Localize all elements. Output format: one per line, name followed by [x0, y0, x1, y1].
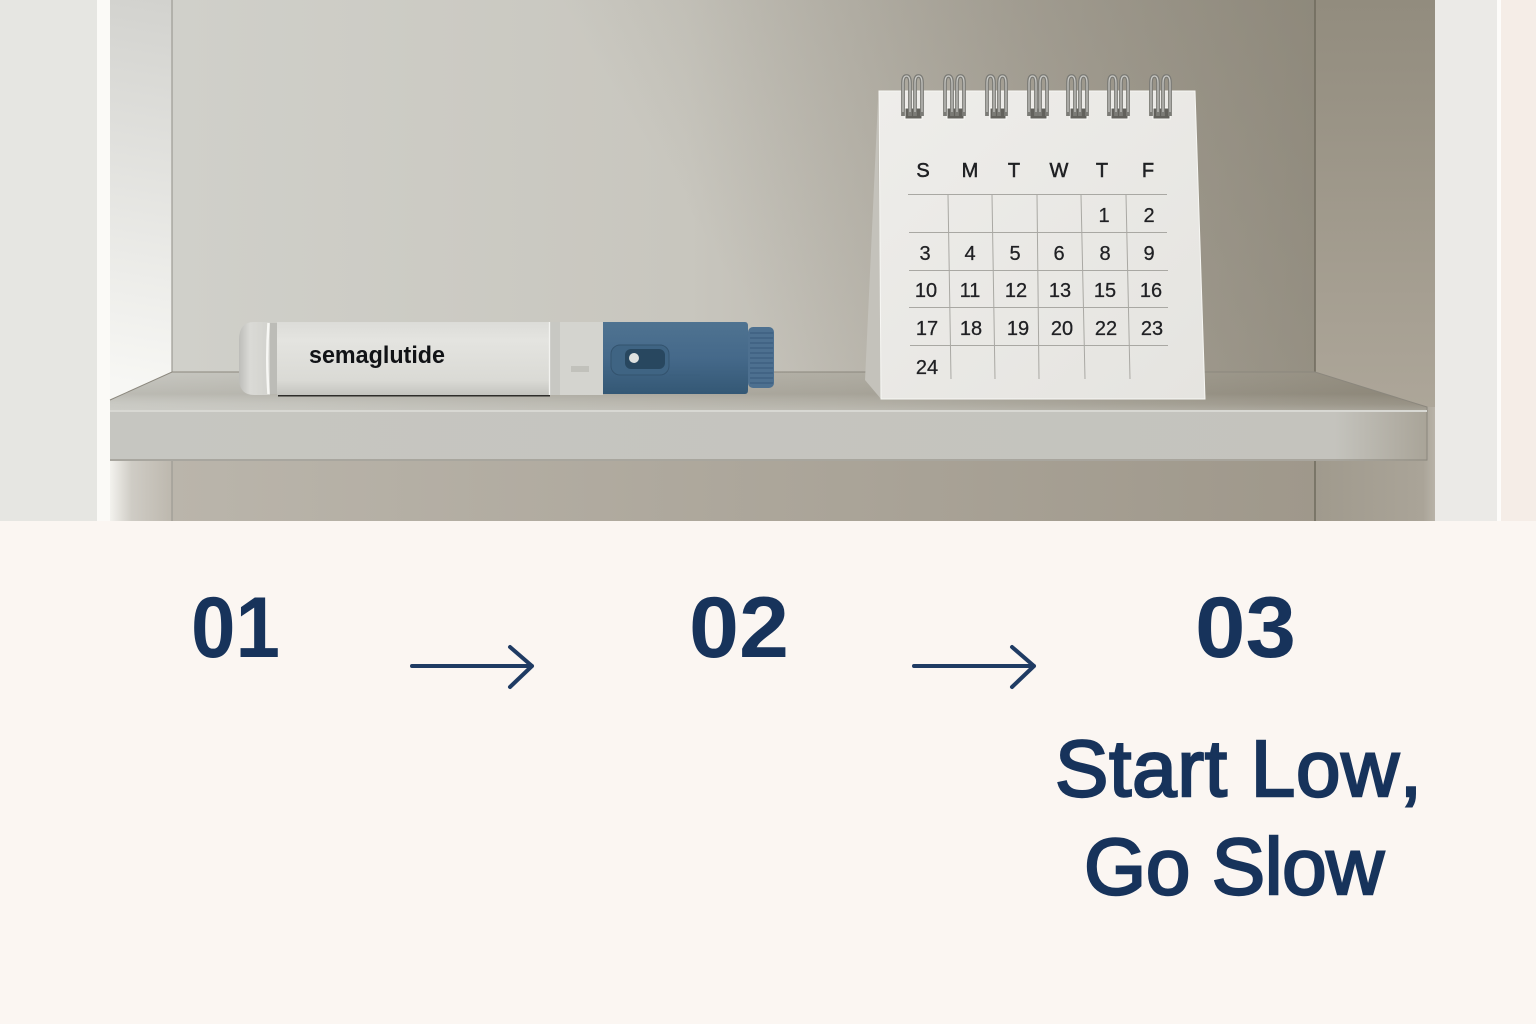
- shelf highlight: [110, 410, 1427, 412]
- calendar dates: 15: [1094, 280, 1116, 302]
- calendar dates: 5: [1009, 243, 1021, 265]
- calendar back stand: [865, 100, 881, 399]
- dose window recess: [611, 345, 669, 375]
- right frame: [1435, 0, 1497, 521]
- weekday headers: M: [962, 160, 978, 182]
- calendar dates: 18: [960, 318, 982, 340]
- left frame edge: [97, 0, 110, 521]
- weekday headers: F: [1142, 160, 1154, 182]
- calendar grid: [908, 194, 1168, 379]
- shelf front edge: [110, 412, 1427, 461]
- calendar dates: 2: [1143, 205, 1155, 227]
- calendar spiral rings: [903, 76, 1170, 116]
- recess guide line: [669, 374, 700, 376]
- right inner wall below shelf: [1315, 407, 1435, 521]
- pen band: [270, 323, 277, 394]
- step number 01: 01: [191, 580, 280, 676]
- pen collar groove: [550, 322, 560, 395]
- pen collar: [549, 322, 603, 395]
- arrow 2 to 3: [914, 647, 1034, 687]
- pen collar seam: [548, 322, 550, 395]
- calendar dates: [915, 205, 1163, 379]
- headline: Start Low,: [1055, 724, 1422, 813]
- injection pen: [239, 322, 774, 395]
- pen band highlight: [267, 323, 268, 394]
- calendar dates: 1: [1098, 205, 1110, 227]
- calendar dates: 23: [1141, 318, 1163, 340]
- shelf edge lines: [110, 372, 1427, 460]
- calendar dates: 6: [1053, 243, 1065, 265]
- calendar dates: 10: [915, 280, 937, 302]
- dose window dot: [629, 353, 639, 363]
- right frame edge: [1497, 0, 1501, 521]
- shelf top surface: [110, 372, 1427, 412]
- calendar dates: 24: [916, 357, 938, 379]
- ring highlights: [903, 76, 1170, 112]
- calendar dates: 22: [1095, 318, 1117, 340]
- calendar page: [879, 91, 1205, 399]
- calendar binding holes: [905, 108, 1170, 119]
- left inner wall below shelf: [110, 460, 172, 521]
- right seam line: [1314, 0, 1316, 521]
- calendar dates: 13: [1049, 280, 1071, 302]
- back wall shading: [172, 0, 1315, 373]
- weekday headers: T: [1008, 160, 1020, 182]
- calendar dates: 20: [1051, 318, 1073, 340]
- pen dial cap: [748, 327, 774, 388]
- bookcase back wall: [172, 0, 1315, 373]
- pen blue grip: [603, 322, 748, 394]
- wall seam lines: [171, 0, 173, 521]
- dose window: [625, 349, 665, 369]
- weekday headers: S: [916, 160, 930, 182]
- right inner wall: [1315, 0, 1435, 408]
- calendar dates: 8: [1099, 243, 1111, 265]
- calendar dates: 19: [1007, 318, 1029, 340]
- left inner wall: [110, 0, 172, 401]
- pen shadow: [278, 394, 550, 396]
- headline: Go Slow: [1084, 822, 1384, 911]
- step number 02: 02: [689, 580, 789, 676]
- back wall below shelf: [172, 460, 1315, 521]
- weekday headers: T: [1096, 160, 1108, 182]
- calendar dates: 11: [960, 280, 980, 302]
- dial ridges: [750, 333, 773, 383]
- calendar dates: 12: [1005, 280, 1027, 302]
- pen label: semaglutide: [309, 342, 445, 369]
- weekday headers: W: [1050, 160, 1069, 182]
- calendar dates: 17: [916, 318, 938, 340]
- calendar dates: 9: [1143, 243, 1155, 265]
- headline: [1055, 724, 1422, 911]
- pen white body: [277, 322, 550, 395]
- shelf top shadow: [110, 372, 1427, 412]
- arrow 1 to 2: [412, 647, 532, 687]
- ring wires: [903, 76, 1170, 116]
- right outer panel: [1501, 0, 1536, 521]
- calendar dates: 4: [964, 243, 976, 265]
- calendar dates: 16: [1140, 280, 1162, 302]
- photo: shelf scene: [0, 0, 1536, 521]
- pen end cap: [239, 322, 270, 395]
- left outer panel: [0, 0, 97, 521]
- desk calendar: [865, 76, 1205, 399]
- step number 03: 03: [1195, 580, 1296, 676]
- weekday headers: [916, 160, 1154, 182]
- pen collar mark: [571, 366, 589, 372]
- calendar dates: 3: [919, 243, 931, 265]
